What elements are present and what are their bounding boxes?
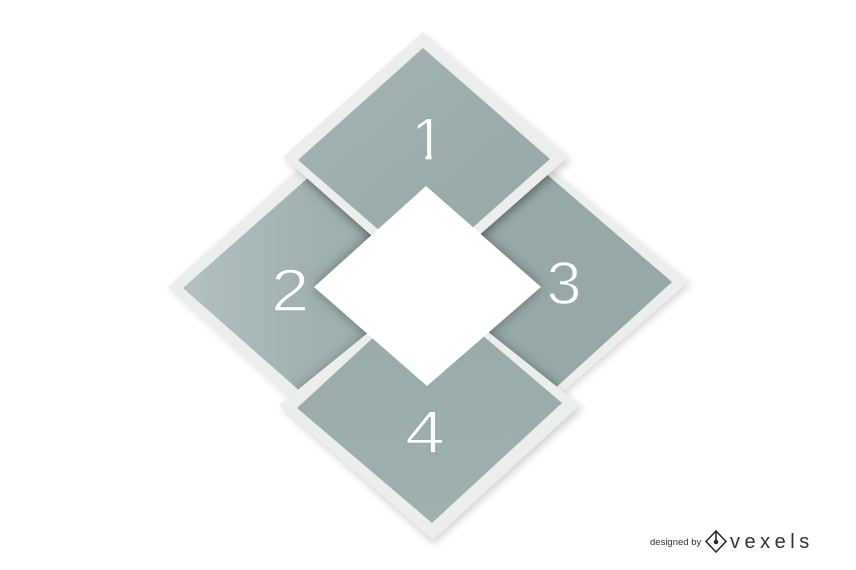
watermark: vexels bbox=[650, 531, 814, 553]
icon: vexels diamond bbox=[706, 531, 726, 552]
number 2: 2 bbox=[271, 256, 309, 324]
panel: diamond 4 bbox=[279, 284, 583, 544]
inner shadow: diamond 2 bbox=[295, 178, 372, 390]
panel: diamond 1 bbox=[283, 32, 571, 287]
number 1: 1 bbox=[411, 106, 445, 173]
center white diamond bbox=[314, 186, 541, 386]
number 4: 4 bbox=[405, 400, 445, 467]
watermark caption: designed by bbox=[650, 537, 701, 548]
panel: diamond 3 bbox=[480, 170, 691, 395]
inner shadow: diamond 3 bbox=[480, 175, 560, 386]
number 3: 3 bbox=[546, 250, 582, 318]
panel: diamond 2 bbox=[168, 170, 372, 398]
vexels wordmark: vexels bbox=[730, 531, 814, 553]
